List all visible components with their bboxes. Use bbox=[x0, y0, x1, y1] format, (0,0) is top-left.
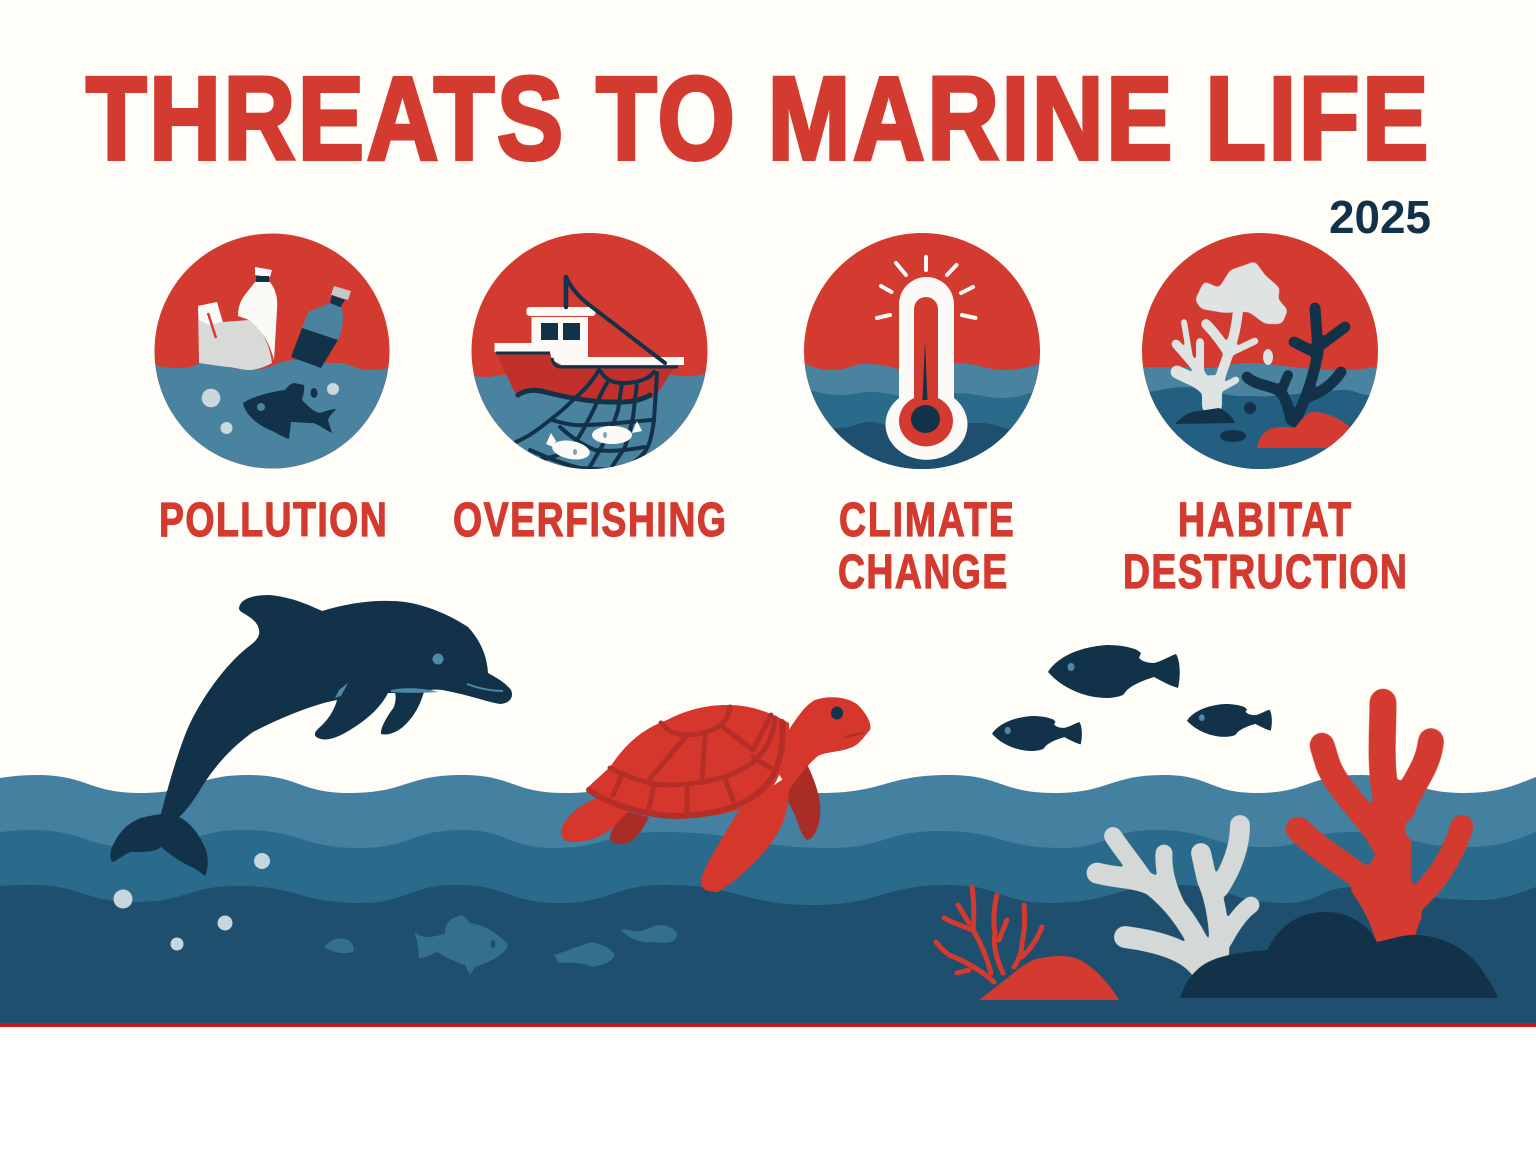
white coral bbox=[1097, 825, 1251, 975]
white bottle bbox=[238, 267, 277, 360]
polluted fish bbox=[243, 383, 336, 439]
caught fish bbox=[546, 421, 642, 462]
icon: overfishing bbox=[465, 228, 713, 475]
bubbles bbox=[202, 383, 339, 434]
bubbles near dolphin bbox=[114, 853, 270, 950]
large red coral bbox=[1298, 702, 1462, 945]
label: habitat destruction bbox=[1123, 494, 1407, 599]
small red coral bbox=[936, 887, 1119, 1000]
panel: climate change bbox=[800, 228, 1045, 599]
plastic bag bbox=[198, 302, 272, 370]
panel: overfishing bbox=[453, 228, 726, 547]
title: THREATS TO MARINE LIFE bbox=[86, 53, 1428, 185]
label: habitat destruction: HABITAT bbox=[1178, 494, 1351, 547]
icon: pollution bbox=[150, 228, 395, 475]
icon: damaged reef bbox=[1138, 228, 1383, 475]
label: climate change bbox=[838, 494, 1014, 599]
head and flippers bbox=[561, 697, 870, 892]
label: overfishing: OVERFISHING bbox=[453, 494, 726, 547]
thermometer body bbox=[886, 277, 968, 460]
faint underwater fish bbox=[324, 915, 677, 975]
boat deck and cabin bbox=[494, 307, 684, 367]
icon: thermometer bbox=[800, 228, 1045, 475]
label: climate change: CLIMATE bbox=[839, 494, 1014, 547]
bottom rule bbox=[0, 1023, 1536, 1027]
dark reef rock bbox=[1180, 912, 1498, 998]
rear flippers bbox=[610, 760, 820, 844]
school of fish bbox=[992, 645, 1272, 751]
boat hull bbox=[496, 353, 674, 402]
label: habitat destruction: DESTRUCTION bbox=[1123, 546, 1407, 599]
shell bbox=[587, 705, 789, 818]
rocks bbox=[1175, 402, 1256, 442]
coral fragment bbox=[1263, 349, 1273, 365]
fish right bbox=[1187, 704, 1272, 737]
mast and line bbox=[566, 277, 665, 363]
ocean waves bbox=[0, 775, 1536, 1024]
panel: habitat destruction bbox=[1123, 228, 1407, 599]
red mound bbox=[1257, 412, 1351, 448]
dolphin bbox=[110, 595, 512, 876]
turtle face bbox=[831, 706, 863, 737]
heat rays bbox=[877, 257, 976, 318]
fish large bbox=[1048, 645, 1180, 698]
label: climate change: CHANGE bbox=[838, 546, 1007, 599]
year: 2025 bbox=[1329, 191, 1431, 243]
fish left bbox=[992, 716, 1082, 751]
blue bottle bbox=[291, 286, 351, 368]
fishing net bbox=[516, 370, 657, 470]
bleached coral bbox=[1176, 261, 1288, 408]
panel: pollution bbox=[150, 228, 395, 547]
label: pollution: POLLUTION bbox=[159, 494, 387, 547]
sea turtle bbox=[561, 697, 870, 892]
dark coral bbox=[1247, 308, 1345, 422]
